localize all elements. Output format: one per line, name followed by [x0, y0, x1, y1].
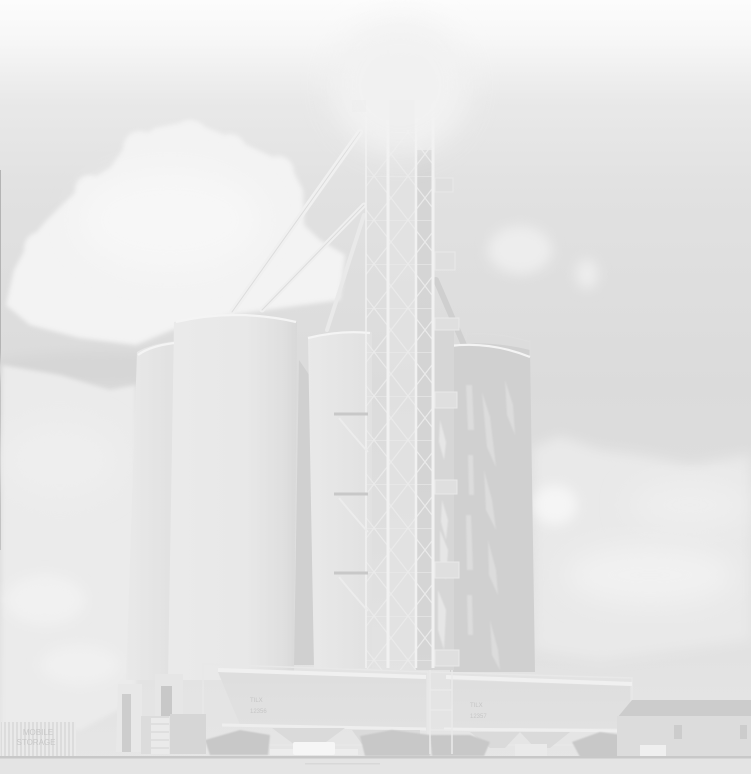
cloud: small upper right [488, 226, 598, 289]
mist behind tower top [345, 40, 455, 140]
wheels [205, 730, 630, 757]
silo: centre [308, 331, 372, 668]
silo: far left [126, 341, 175, 680]
silo: dark gap [294, 360, 316, 665]
silos [126, 315, 535, 680]
shaded-side diamonds [438, 420, 448, 650]
dark band under upper cloud [0, 352, 220, 384]
conveyor pipes [232, 132, 464, 345]
cloud: lower left [2, 365, 136, 730]
storage container: MOBILE [23, 728, 53, 737]
building right [617, 700, 751, 759]
storage container [1, 722, 76, 756]
tower lattice [366, 130, 434, 670]
ladder between cars [430, 670, 452, 754]
rail car: left: TILX [250, 698, 263, 704]
silo: shaded right [450, 343, 535, 672]
rail cars [203, 664, 632, 757]
cloud: large upper left [6, 120, 345, 345]
rail car: left: 12356 [250, 709, 267, 715]
storage container: STORAGE [17, 738, 55, 747]
elevator tower [330, 15, 470, 670]
silo: large left [168, 316, 297, 680]
fade at top of tower [330, 15, 470, 155]
left edge sliver [0, 170, 1, 550]
rail car: right: TILX [470, 703, 483, 709]
cloud brighter centre [80, 170, 260, 270]
loading sheds [116, 674, 206, 754]
pallets [270, 742, 547, 756]
silo railings [466, 332, 530, 356]
tower side platforms [352, 100, 459, 666]
tower uprights [366, 50, 433, 668]
ground [0, 756, 751, 774]
rail car: left [203, 664, 428, 745]
cloud: lower right [532, 436, 751, 660]
silo: shadow light patches [466, 380, 515, 670]
tower platforms [334, 414, 368, 611]
rail car: right: 12357 [470, 714, 487, 720]
rail car: right [430, 672, 632, 748]
tower body shading [416, 150, 434, 670]
